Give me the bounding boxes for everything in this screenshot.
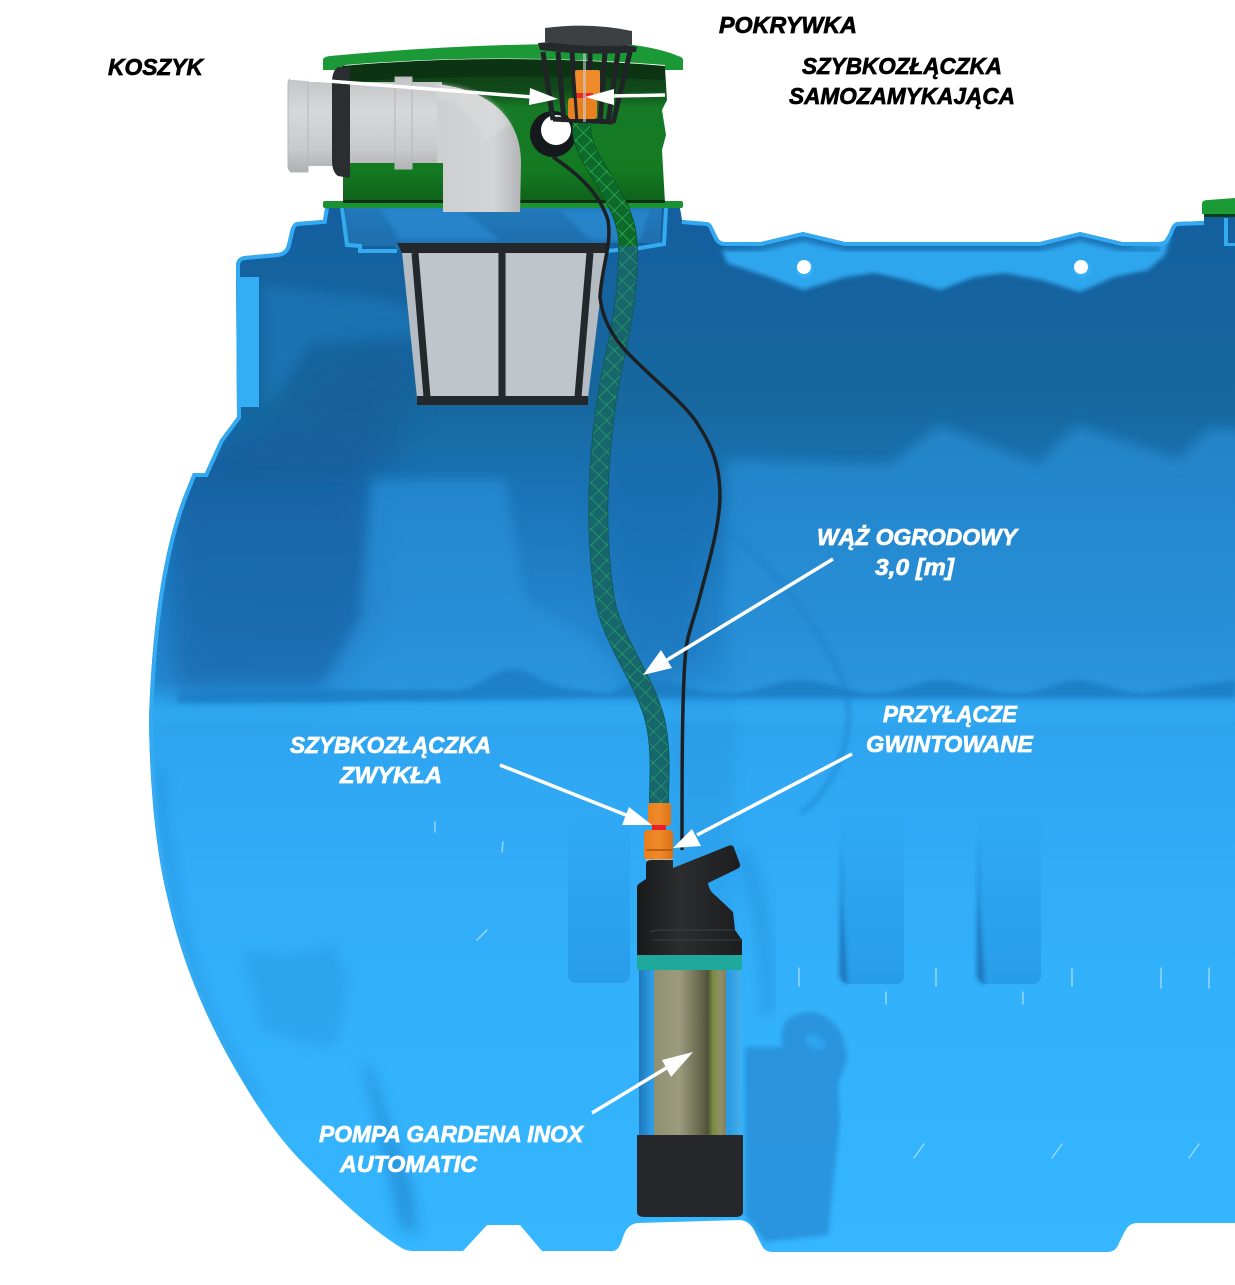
tank left light panel <box>240 277 259 407</box>
tank lower light band <box>150 705 1235 722</box>
tank recess middle <box>837 846 904 985</box>
tank mounting hole left <box>796 260 814 278</box>
label: szybkozłączka samozamykająca: SAMOZAMYKAJĄCA <box>789 83 1015 109</box>
riser base flange <box>323 200 683 208</box>
riser lid <box>323 44 683 70</box>
floating intake cage <box>538 26 637 123</box>
label: szybkozłączka samozamykająca: SZYBKOZŁĄCZKA <box>802 53 1002 79</box>
label: przyłącze gwintowane: GWINTOWANE <box>866 731 1034 757</box>
ghost arc shadows <box>800 698 852 814</box>
specular highlights <box>435 822 1209 1158</box>
tank interior shading <box>170 285 1235 1000</box>
label: pompa gardena inox automatic <box>319 1121 585 1177</box>
label: wąż ogrodowy: 3,0 [m] <box>875 554 955 580</box>
quick connector upper <box>648 803 671 826</box>
label: pompa gardena inox automatic: POMPA GARDENA INOX <box>319 1121 585 1147</box>
tank recess right <box>974 846 1041 985</box>
riser cable hole <box>530 111 576 157</box>
gasket <box>332 67 350 178</box>
black cable <box>553 157 720 850</box>
pump shadow <box>745 1012 847 1242</box>
riser lid shade <box>342 59 665 82</box>
neck trough <box>342 208 666 251</box>
threaded connector <box>644 830 673 861</box>
tank left edge band <box>158 777 258 1096</box>
tank recess left <box>568 884 630 983</box>
arrow: szybkozłączka zwykła <box>500 765 652 825</box>
label: przyłącze gwintowane: PRZYŁĄCZE <box>883 701 1018 727</box>
tank top rim <box>149 208 1204 1077</box>
pump <box>637 803 743 1217</box>
riser body <box>343 68 667 203</box>
filter basket <box>397 243 610 405</box>
label: szybkozłączka samozamykająca <box>789 53 1015 109</box>
pump clear housing <box>639 968 741 1136</box>
left floor shadow <box>362 1060 418 1236</box>
label: szybkozłączka zwykła: ZWYKŁA <box>339 762 442 788</box>
tank body <box>149 208 1235 1253</box>
tank mounting hole right <box>1073 260 1091 278</box>
label: przyłącze gwintowane <box>866 701 1034 757</box>
arrow: wąż ogrodowy <box>643 559 833 675</box>
label: wąż ogrodowy <box>817 524 1020 580</box>
left boss <box>248 950 347 1044</box>
label: koszyk: KOSZYK <box>108 54 204 80</box>
cage bars front <box>572 52 605 123</box>
tank top light band <box>722 238 1170 292</box>
cage brim <box>538 41 637 54</box>
right green riser stub <box>1202 198 1235 246</box>
green riser <box>323 44 683 246</box>
cage cap <box>545 26 632 46</box>
drain elbow pipe <box>288 67 521 212</box>
tank mid seam <box>178 669 1235 703</box>
arrow: przyłącze gwintowane <box>673 754 852 848</box>
arrow: szybkozłączka samozamykająca <box>585 89 665 105</box>
cage bars <box>543 52 630 123</box>
garden hose <box>598 246 660 803</box>
red seal <box>652 825 666 831</box>
label: wąż ogrodowy: WĄŻ OGRODOWY <box>817 524 1020 550</box>
label: pompa gardena inox automatic: AUTOMATIC <box>339 1151 477 1177</box>
label: szybkozłączka zwykła <box>290 732 491 788</box>
floor notch <box>482 1225 523 1230</box>
label: pokrywka: POKRYWKA <box>719 12 857 38</box>
tank top thin shade <box>725 239 1160 249</box>
arrow: pompa <box>592 1052 693 1113</box>
teal band <box>637 955 742 970</box>
arrow: koszyk <box>290 78 558 105</box>
pump steel cylinder <box>654 970 726 1136</box>
hose upper <box>582 123 628 246</box>
label: szybkozłączka zwykła: SZYBKOZŁĄCZKA <box>290 732 491 758</box>
quick connector orange <box>568 52 600 122</box>
pump head ridges <box>650 930 741 940</box>
pump base <box>637 1135 743 1217</box>
pump head <box>637 845 742 956</box>
